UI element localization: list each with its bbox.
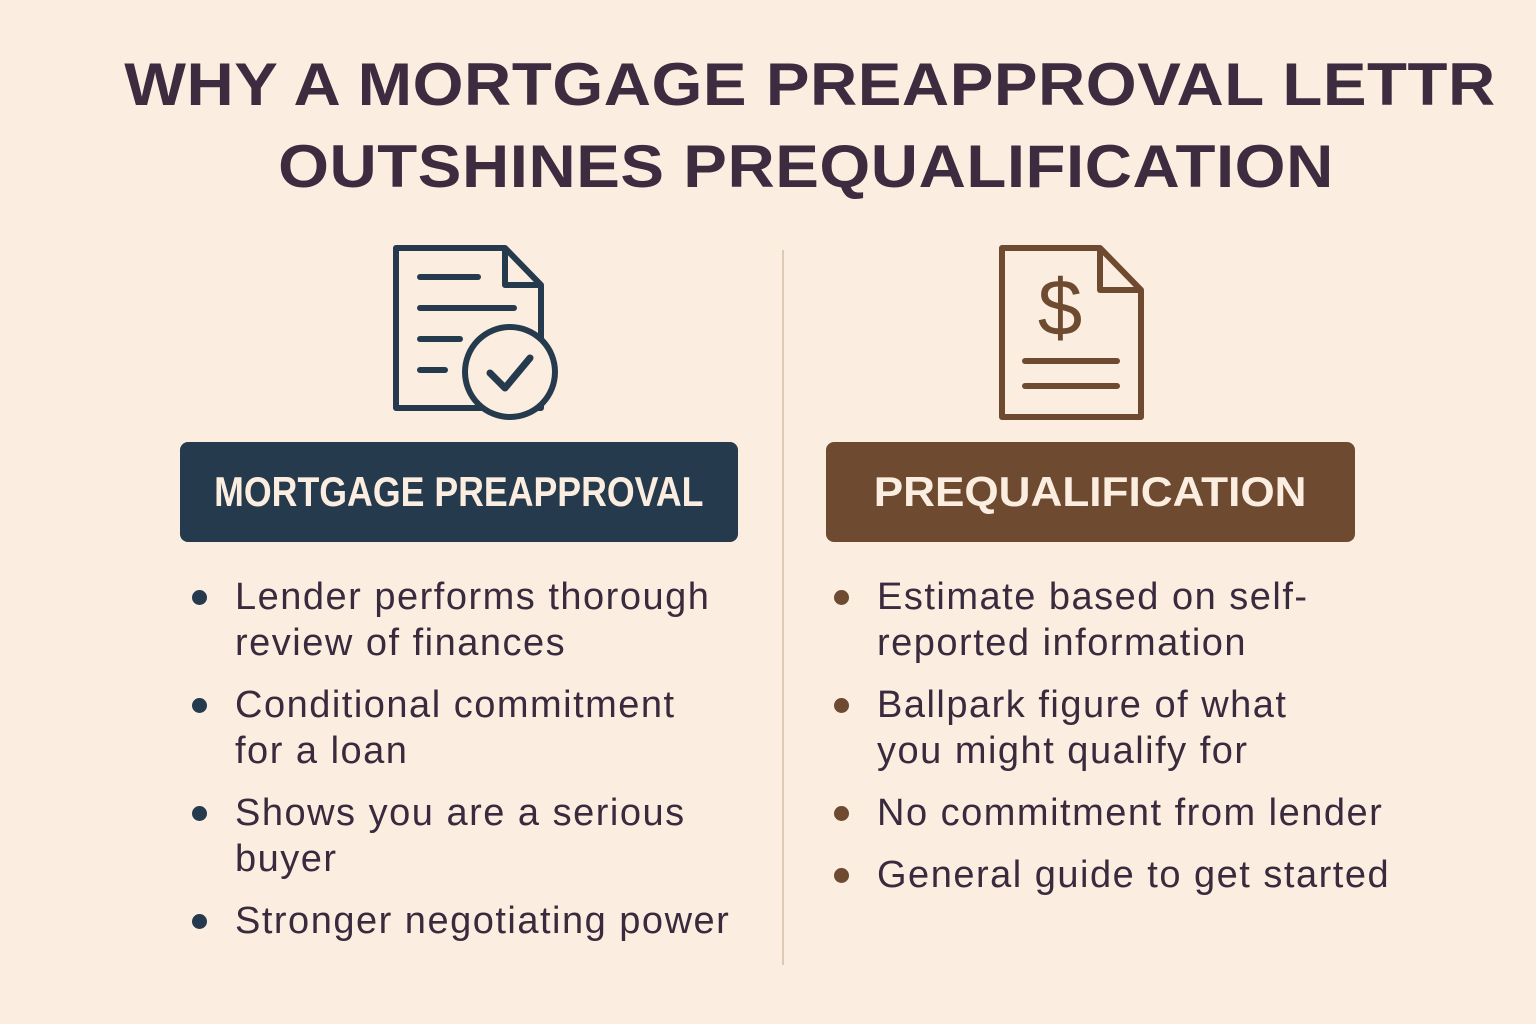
icon: document with dollar: $ (1038, 263, 1082, 352)
list: prequalification: Ballpark figure of what (877, 684, 1287, 726)
list: preapproval: review of finances (235, 622, 566, 664)
list: preapproval: Conditional commitment (235, 684, 676, 726)
title (124, 51, 1496, 200)
list: preapproval: for a loan (235, 730, 408, 772)
badge: prequalification (826, 442, 1355, 542)
badge: mortgage preapproval: MORTGAGE PREAPPROVAL (214, 468, 704, 515)
list: prequalification: No commitment from lender (877, 792, 1383, 834)
badge: prequalification: PREQUALIFICATION (874, 468, 1307, 515)
list: prequalification (834, 576, 1390, 896)
list: prequalification: you might qualify for (877, 730, 1249, 772)
icon: document with check (393, 245, 558, 420)
title: WHY A MORTGAGE PREAPPROVAL LETTR (124, 51, 1496, 118)
list: preapproval: Shows you are a serious (235, 792, 686, 834)
icon: document with dollar (999, 245, 1144, 420)
title: OUTSHINES PREQUALIFICATION (278, 133, 1334, 200)
list: preapproval: Lender performs thorough (235, 576, 710, 618)
list: preapproval (192, 576, 730, 942)
list: prequalification: General guide to get started (877, 854, 1390, 896)
list: prequalification: Estimate based on self- (877, 576, 1309, 618)
badge: mortgage preapproval (180, 442, 738, 542)
list: preapproval: Stronger negotiating power (235, 900, 730, 942)
list: prequalification: reported information (877, 622, 1247, 664)
list: preapproval: buyer (235, 838, 338, 880)
